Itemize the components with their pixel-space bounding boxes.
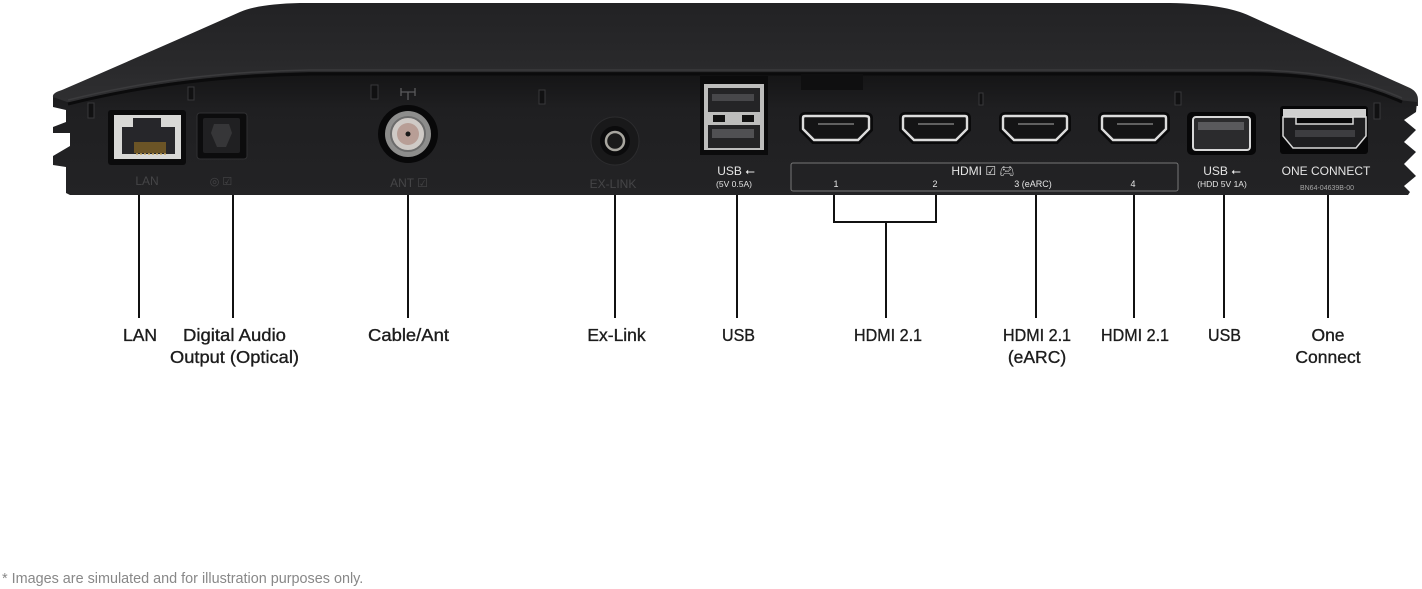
HDMI printed heading: HDMI ☑ 🎮︎ — [951, 164, 1015, 178]
USB printed label: USB ⭠ — [717, 164, 755, 178]
HDMI port 2 — [903, 116, 967, 140]
label: Ex-Link: Ex-Link — [587, 325, 646, 345]
HDMI pin bars — [818, 123, 1153, 125]
HDMI port 4 — [1102, 116, 1166, 140]
HDMI port 1 — [803, 116, 869, 140]
notch block — [801, 74, 863, 90]
device body — [53, 3, 1418, 195]
optical printed icons: ◎ ☑ — [210, 176, 232, 188]
ANT printed label: ANT ☑ — [390, 176, 428, 190]
One Connect port — [1280, 106, 1368, 154]
HDMI port 3 — [1003, 116, 1067, 140]
label: One Connect: One — [1311, 325, 1345, 345]
leader lines — [139, 195, 1328, 318]
dual USB port — [700, 76, 768, 155]
small clips — [88, 85, 1380, 119]
label: USB: USB — [1208, 325, 1241, 345]
side USB printed label: USB ⭠ — [1203, 164, 1241, 178]
LAN printed label: LAN — [135, 174, 159, 188]
lower panel — [53, 72, 1417, 195]
side USB rating: (HDD 5V 1A) — [1197, 179, 1247, 189]
side USB port — [1187, 112, 1256, 155]
label: One Connect: Connect — [1295, 347, 1361, 367]
optical audio port — [197, 113, 247, 159]
label: USB: USB — [722, 325, 755, 345]
label: LAN: LAN — [123, 325, 157, 345]
antenna icon — [401, 88, 415, 100]
One Connect printed label: ONE CONNECT — [1282, 164, 1371, 178]
label: HDMI 2.1 (eARC): HDMI 2.1 — [1003, 325, 1071, 345]
HDMI port numbers — [833, 179, 1136, 189]
label: HDMI 2.1: HDMI 2.1 — [854, 325, 922, 345]
ex-link jack — [591, 117, 639, 165]
label: HDMI 2.1 (eARC): (eARC) — [1008, 347, 1066, 367]
printed port labels on device — [135, 163, 1371, 192]
upper housing — [53, 3, 1418, 106]
HDMI port numbers: 3 (eARC) — [1014, 179, 1052, 189]
label: Digital Audio Output (Optical): Digital Audio — [183, 325, 286, 345]
HDMI port numbers: 1 — [833, 179, 839, 189]
label: HDMI 2.1: HDMI 2.1 — [1101, 325, 1169, 345]
model number: BN64-04639B-00 — [1300, 185, 1354, 192]
label: Digital Audio Output (Optical): Output (Optical) — [170, 347, 299, 367]
Ex-Link printed label: EX-LINK — [590, 177, 636, 191]
panel top edge highlight — [68, 74, 1402, 104]
LAN port — [108, 110, 186, 165]
footnote: * Images are simulated and for illustration purposes only. — [2, 571, 363, 587]
HDMI port numbers: 4 — [1130, 179, 1136, 189]
antenna port — [378, 105, 438, 163]
HDMI port numbers: 2 — [932, 179, 938, 189]
HDMI bracket box — [791, 163, 1178, 191]
label: Cable/Ant: Cable/Ant — [368, 325, 449, 345]
USB rating: (5V 0.5A) — [716, 179, 752, 189]
